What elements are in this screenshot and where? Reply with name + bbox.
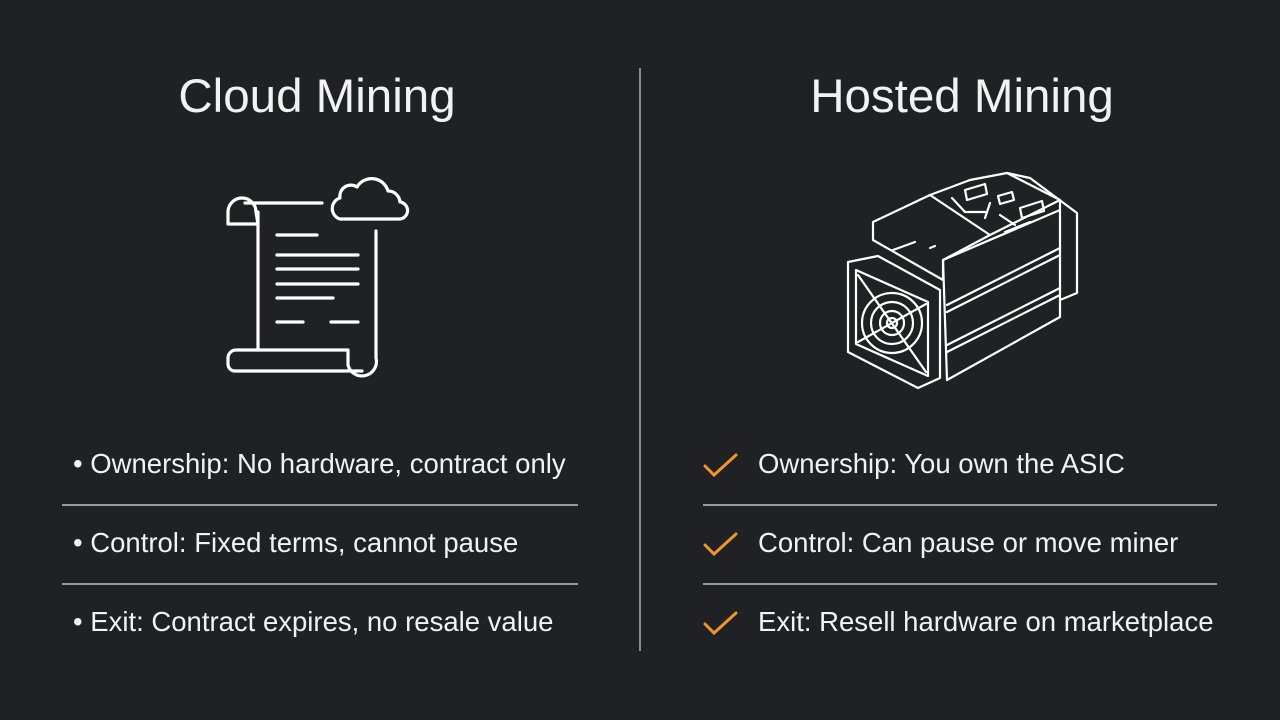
title: Cloud Mining: Cloud Mining	[178, 70, 456, 123]
list: cloud mining	[62, 448, 578, 637]
list: hosted mining	[703, 448, 1217, 637]
item: control: Control: Can pause or move miner	[758, 527, 1178, 558]
item: exit: • Exit: Contract expires, no resale value	[73, 606, 553, 637]
item: exit: Exit: Resell hardware on marketplace	[758, 606, 1213, 637]
icon: ASIC miner	[846, 172, 1078, 390]
title: Hosted Mining: Hosted Mining	[810, 70, 1114, 123]
divider: vertical	[639, 68, 640, 651]
icon: scroll with cloud	[226, 177, 410, 378]
item: ownership: Ownership: You own the ASIC	[758, 448, 1125, 479]
item: ownership: • Ownership: No hardware, contract only	[73, 448, 566, 479]
item: control: • Control: Fixed terms, cannot pause	[73, 527, 518, 558]
